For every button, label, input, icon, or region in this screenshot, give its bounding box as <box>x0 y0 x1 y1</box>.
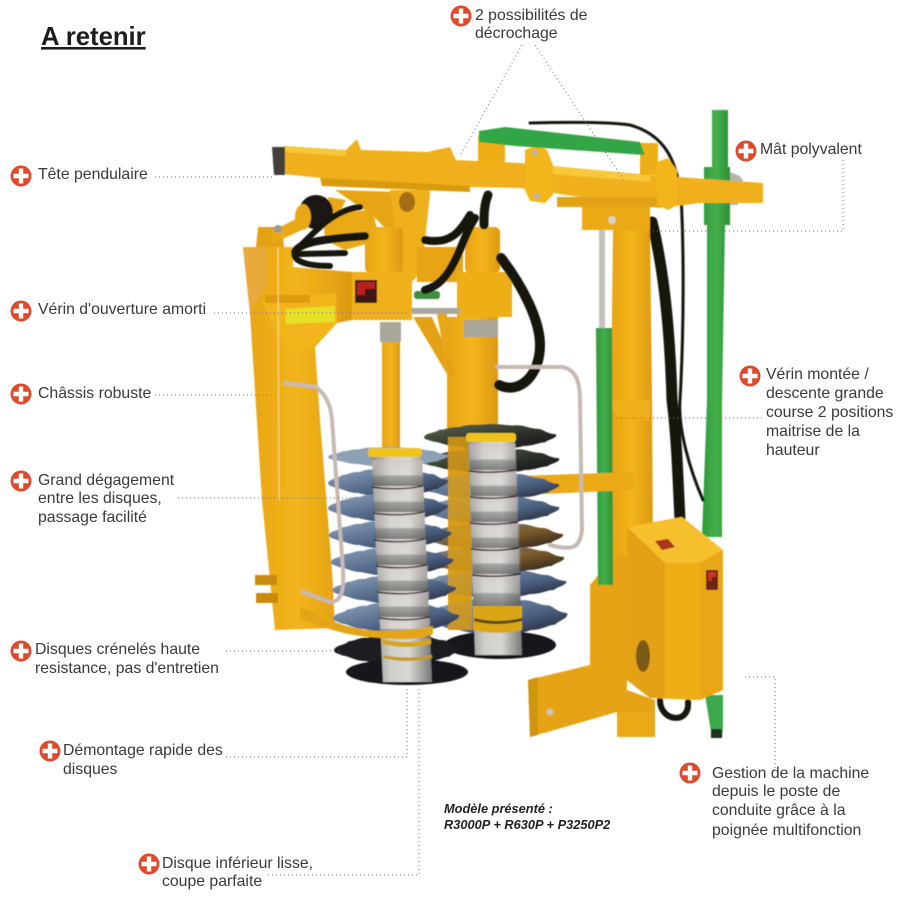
leader line <box>155 176 275 178</box>
callout text: Vérin montée / <box>766 366 869 383</box>
icon: plus <box>680 762 700 784</box>
icon: plus <box>10 166 32 186</box>
callout: Disque inférieur lisse <box>138 686 419 890</box>
callout text: resistance, pas d'entretien <box>35 660 219 677</box>
handles <box>285 367 582 602</box>
leader line <box>226 686 407 757</box>
machine illustration <box>243 110 763 738</box>
callout: Mât polyvalent <box>652 140 862 231</box>
callout: Tête pendulaire <box>10 166 275 186</box>
leader line <box>745 677 775 768</box>
control box <box>627 517 723 700</box>
green mast <box>702 110 745 738</box>
callout: Vérin montée / descente <box>615 366 893 459</box>
right cylinder <box>466 433 522 655</box>
callout text: Vérin d'ouverture amorti <box>38 301 206 318</box>
left disc stack <box>328 447 468 685</box>
callout: Vérin d'ouverture amorti <box>10 300 410 322</box>
callout text: disques <box>63 761 118 778</box>
leader line <box>214 312 410 314</box>
icon: plus <box>10 300 32 322</box>
model note: R3000P + R630P + P3250P2 <box>444 817 610 832</box>
callout text: Tête pendulaire <box>38 166 148 183</box>
left cylinder <box>300 448 433 682</box>
callout text: maitrise de la <box>766 423 860 440</box>
callout text: Châssis robuste <box>38 385 151 402</box>
front hydraulic hoses <box>294 195 540 388</box>
callout text: Démontage rapide des <box>63 742 223 759</box>
right column with cap and block <box>413 227 512 630</box>
callout text: passage facilité <box>38 509 147 526</box>
top beam <box>272 139 763 208</box>
leader line <box>652 160 843 231</box>
icon: plus <box>10 384 32 404</box>
icon: plus <box>10 470 32 492</box>
callout text: Disque inférieur lisse, <box>162 855 313 872</box>
icon: plus <box>450 6 472 26</box>
right column over discs <box>448 437 472 630</box>
callout text: hauteur <box>766 442 820 459</box>
callout text: décrochage <box>475 25 558 42</box>
callout text: conduite grâce à la <box>712 802 846 819</box>
title: A retenir <box>41 23 146 51</box>
model note: Modèle présenté : <box>444 801 553 816</box>
leader line <box>226 650 340 652</box>
chrome ram and lower green cylinder <box>596 230 613 585</box>
green ram on top <box>479 127 645 155</box>
callout text: Gestion de la machine <box>712 765 869 782</box>
callout: Démontage rapide <box>40 686 407 778</box>
callout text: entre les disques, <box>38 490 162 507</box>
leader line <box>268 686 419 875</box>
leader lines <box>460 45 625 182</box>
callout: 2 possibilités de décrochage <box>450 6 625 182</box>
callout text: Mât polyvalent <box>760 141 862 158</box>
icon: plus <box>138 854 160 874</box>
callout text: course 2 positions <box>766 404 893 421</box>
callout text: depuis le poste de <box>712 783 840 800</box>
cross beam <box>517 472 633 495</box>
icon: plus <box>736 140 756 162</box>
leader line <box>178 497 352 499</box>
right disc stack <box>421 424 567 659</box>
leader line <box>155 394 276 396</box>
left frame <box>243 210 380 630</box>
left rod with cap and block <box>352 227 460 449</box>
rear hoses <box>530 122 703 718</box>
callout text: 2 possibilités de <box>475 7 588 24</box>
icon: plus <box>10 640 32 662</box>
leader line <box>615 417 762 419</box>
bumper and rod <box>270 195 346 243</box>
callout text: Disques crénelés haute <box>35 641 200 658</box>
callout: Grand dégagement <box>10 470 352 526</box>
right column and plates <box>478 135 677 737</box>
callout text: poignée multifonction <box>712 822 861 839</box>
callout text: Grand dégagement <box>38 472 175 489</box>
callout text: descente grande <box>766 385 884 402</box>
callout: Gestion de la machine <box>680 677 869 839</box>
callout text: coupe parfaite <box>162 873 262 890</box>
central pendant with hole <box>335 190 430 290</box>
icon: plus <box>740 366 760 386</box>
callout: Disques crénelés <box>10 640 340 677</box>
callout: Châssis robuste <box>10 384 276 404</box>
icon: plus <box>40 740 60 762</box>
